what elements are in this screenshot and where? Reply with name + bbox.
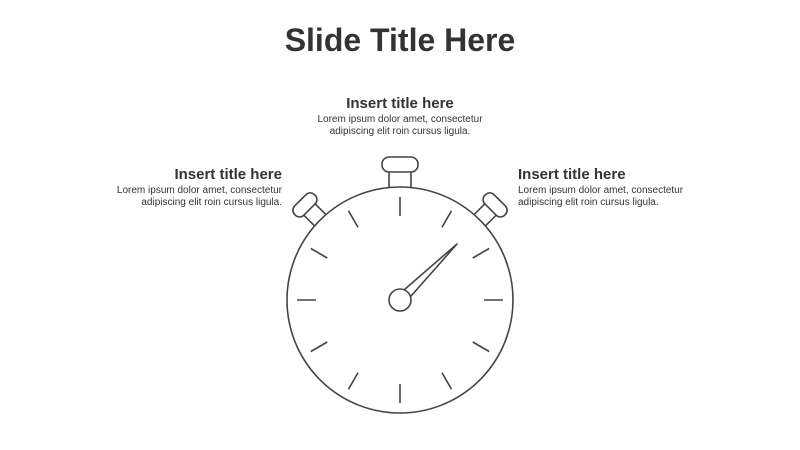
text block: top: Insert title here bbox=[346, 95, 454, 112]
text block: right: Insert title here bbox=[518, 166, 626, 183]
text block: left: Insert title here bbox=[174, 166, 282, 183]
text block: left bbox=[117, 166, 282, 208]
text block: left: Lorem ipsum dolor amet, consectetur bbox=[117, 185, 282, 196]
text block: top: adipiscing elit roin cursus ligula. bbox=[330, 126, 470, 137]
text block: right: Lorem ipsum dolor amet, consectetur bbox=[518, 185, 683, 196]
text block: right bbox=[518, 166, 683, 208]
text block: left: adipiscing elit roin cursus ligula. bbox=[141, 197, 282, 208]
text block: top bbox=[317, 95, 483, 137]
text block: right: adipiscing elit roin cursus ligula. bbox=[518, 197, 659, 208]
text block: top: Lorem ipsum dolor amet, consectetur bbox=[317, 114, 483, 125]
title: Slide Title Here bbox=[285, 22, 515, 58]
